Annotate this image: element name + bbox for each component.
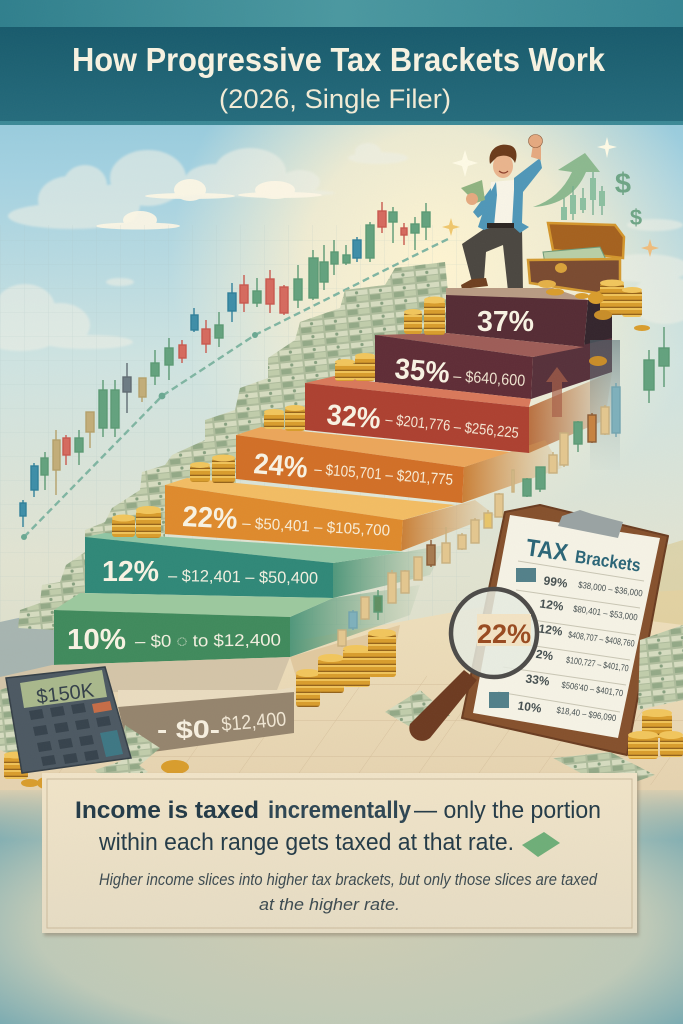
green growth arrow with candles [533,153,605,220]
blue open shirt [478,158,542,233]
caption emphasis line: incrementally [268,797,412,824]
table rows: 10% [517,698,543,716]
tax step 35% [375,333,584,399]
magnifying glass: 22% [477,619,531,649]
calculator keys [29,703,111,766]
chest clasp [555,263,567,273]
tax step 10%: – $0 ◌ to $12,400 [135,630,281,651]
lens [451,589,537,677]
title banner [0,0,683,125]
up arrow beside the 32% step [546,367,568,417]
treasure chest [528,223,624,293]
title: How Progressive Tax Brackets Work [72,41,606,78]
calculator showing $150K: $150K [35,680,96,708]
base step: - $0- [157,716,220,744]
right-side fading step sides [290,290,620,690]
chest lid [548,223,624,258]
ground with paving tiles [0,540,683,840]
tax step 35%: 35% [393,353,451,390]
chest base [528,259,620,293]
subtitle: (2026, Single Filer) [219,84,451,114]
hair [489,145,517,164]
staircase of cash stacks [18,262,448,630]
head [493,154,513,178]
table rows: $80,401 – $53,000 [573,604,638,623]
paper sheet [473,515,660,738]
candlestick chart: right side of steps [338,327,669,647]
cash piles right side [0,625,683,790]
dollar signs: $ [630,205,642,230]
table rows [489,568,643,723]
handle [409,670,477,741]
tax step 24%: – $105,701 – $201,775 [314,461,454,489]
table rows: $18,40 – $96,090 [556,705,617,723]
base step [0,657,294,755]
table rows: 33% [525,671,551,689]
tax step 10% [54,593,333,665]
raised arm and fist [531,144,541,160]
tax step 37%: 37% [477,306,534,338]
cash in chest [543,247,607,264]
smile [499,171,508,173]
tax step 12%: 12% [102,556,159,588]
clouds foreground highlights [96,179,322,230]
chart grid [0,225,470,625]
caption emphasis line: — only the portion [414,797,601,824]
tax step 22%: – $50,401 – $105,700 [242,515,391,540]
table heading: TAX [524,534,570,567]
table rows: $100,727 – $401,70 [566,655,629,673]
table rows: 12% [539,596,565,614]
tax step 32%: 32% [325,399,382,436]
clipboard board [462,505,668,755]
clipboard with tax brackets table [462,505,668,755]
caption emphasis line [75,797,601,856]
magnifying glass [409,589,537,741]
tax step 12%: – $12,401 – $50,400 [168,567,318,588]
hero character celebrating [461,134,542,292]
caption detail lines [99,870,597,914]
clipboard with tax brackets table: Brackets [574,547,642,576]
magnified label [477,614,531,646]
caption emphasis line: Income is taxed [75,797,259,824]
table rows: 2% [535,647,554,663]
metal clip [558,510,623,538]
table rows: $408,707 – $408,760 [568,629,635,649]
tax step 37% [446,288,588,347]
cash pile behind magnifier [385,690,450,728]
shoe [461,278,488,289]
caption panel [42,773,639,936]
caption detail lines: Higher income slices into higher tax brackets, but only those slices are taxed [99,870,597,889]
dollar signs: $ [615,168,631,200]
left arm sleeve [473,188,492,218]
trousers [462,227,523,292]
tax step 32%: – $201,776 – $256,225 [385,411,520,442]
table rows: $38,000 – $36,000 [578,580,643,599]
tax step 22% [165,478,455,551]
tax step 10%: 10% [67,624,126,656]
clouds [0,143,683,351]
icon: cash note [522,832,560,857]
tax step 24% [236,427,510,503]
table rows: 12% [538,621,564,639]
sparkles [442,137,659,257]
caption detail lines: at the higher rate. [259,895,400,914]
bottom coin piles [4,709,683,789]
dollar signs [615,168,642,230]
hand holding cash [461,180,485,203]
tax step 24%: 24% [252,448,309,485]
tax step 35%: – $640,600 [453,368,526,390]
table rows: $506'40 – $401,70 [561,680,624,698]
tax step 12% [85,533,405,598]
caption emphasis line: within each range gets taxed at that rate. [98,829,514,856]
candlestick chart: rising market [20,202,430,527]
belt [487,223,514,228]
tax step 22%: 22% [182,501,238,536]
gold coin stacks [112,280,650,707]
white tee [488,180,516,226]
calculator showing $150K [6,667,131,773]
base step: $12,400 [221,708,287,736]
table rows: 99% [543,573,569,591]
dashed trend line [21,238,450,540]
tax step 32% [305,376,531,453]
calculator screen [20,670,107,708]
